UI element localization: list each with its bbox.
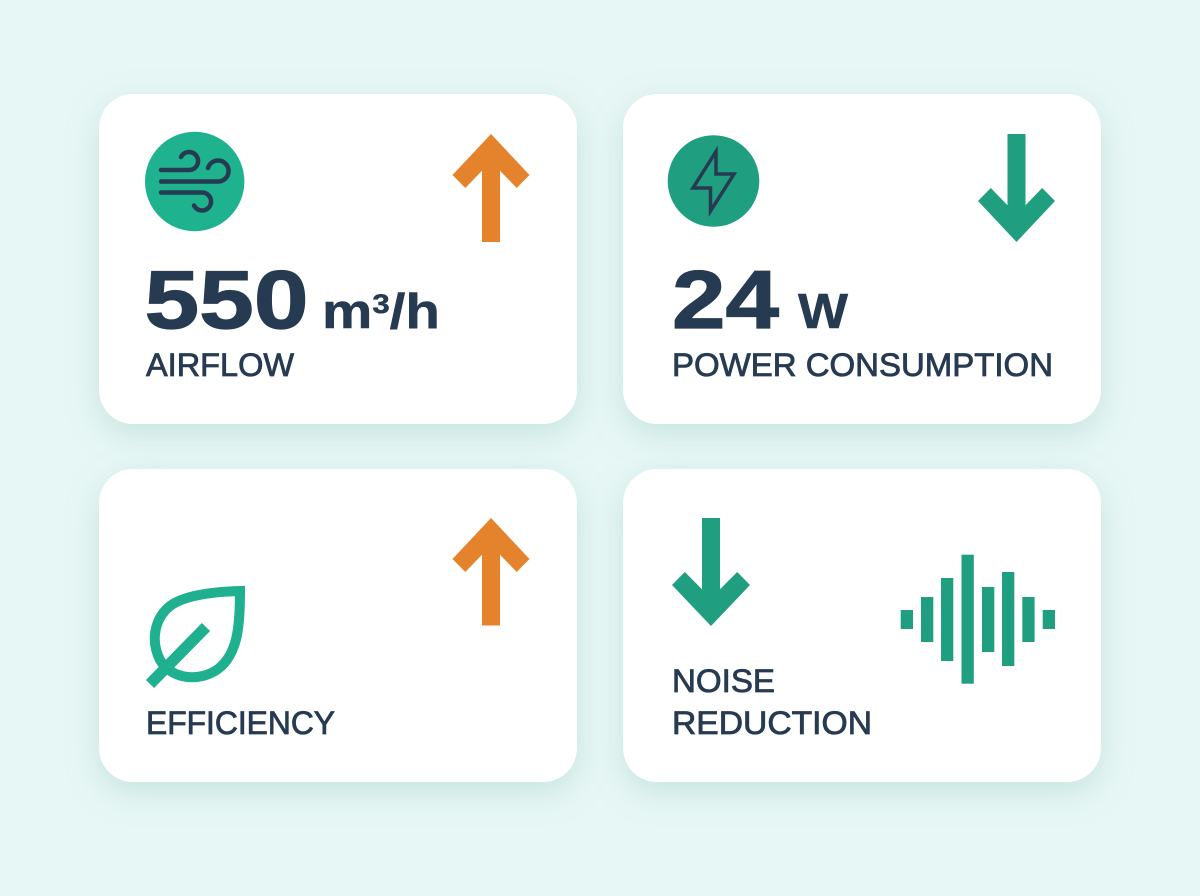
label: reduction: REDUCTION <box>672 705 872 741</box>
icon: leaf <box>150 591 240 684</box>
icon: lightning bolt <box>668 135 759 227</box>
unit: W: W <box>798 285 849 339</box>
label: power consumption: POWER CONSUMPTION <box>672 347 1053 383</box>
icon: sound wave <box>901 555 1055 684</box>
unit: m³/h: m <box>322 284 372 339</box>
value: 550: 550 <box>144 253 308 346</box>
panel: efficiency <box>99 469 577 782</box>
arrow: efficiency up <box>452 518 530 626</box>
icon: wind <box>145 132 244 231</box>
unit: m³/h: /h <box>390 284 440 339</box>
panel: power consumption <box>623 94 1101 424</box>
panel: noise reduction <box>623 469 1101 782</box>
panel: airflow <box>99 94 577 424</box>
label: efficiency: EFFICIENCY <box>146 705 335 741</box>
arrow: power down <box>978 134 1055 242</box>
arrow: airflow up <box>452 134 530 242</box>
arrow: noise down <box>672 518 750 626</box>
value: 24: 24 <box>672 253 779 346</box>
label: airflow: AIRFLOW <box>146 347 295 383</box>
unit: m³/h: 3 <box>372 290 390 319</box>
label: noise: NOISE <box>672 663 775 699</box>
